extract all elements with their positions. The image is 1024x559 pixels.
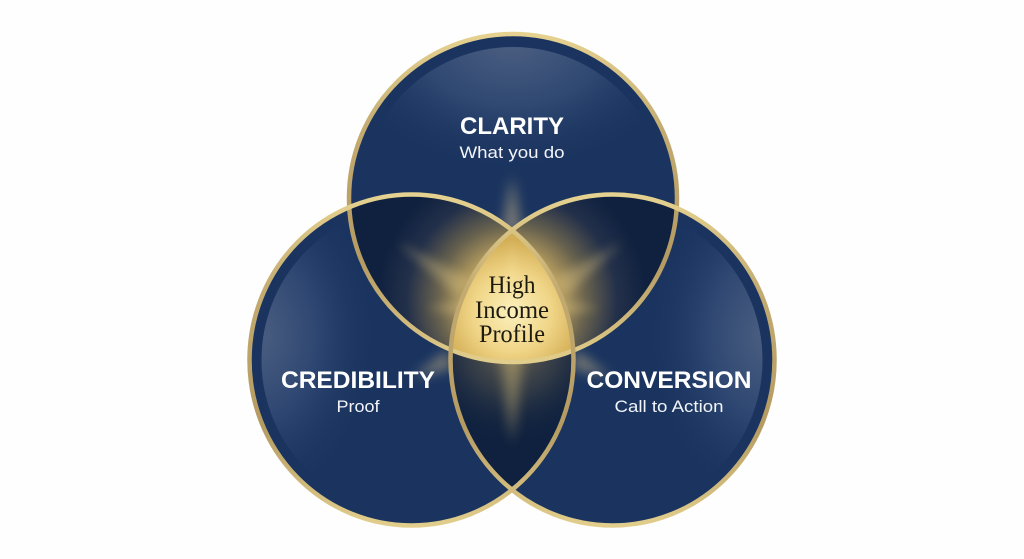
circle: clarity [349,34,677,362]
venn diagram [247,32,777,528]
outer glow rays [412,175,612,378]
label: credibility [281,367,435,416]
label: conversion: CONVERSION [586,367,752,394]
gold ring: conversion [450,194,774,526]
center region: high income profile [453,233,571,360]
overlap: clarity and credibility [352,196,508,346]
label: conversion [586,367,752,416]
light rays [398,243,622,316]
gold ring: clarity [349,34,677,362]
label: conversion: Call to Action [614,397,724,416]
label: clarity [460,113,564,162]
label: high income profile [475,272,549,348]
label: clarity: CLARITY [460,113,564,140]
overlap: clarity and conversion [516,196,674,348]
circle: credibility [250,194,574,526]
circle: conversion [450,194,774,526]
gold ring: credibility [250,194,574,526]
label: high income profile: Profile [479,321,545,348]
label: credibility: CREDIBILITY [281,367,435,394]
label: credibility: Proof [336,397,380,416]
label: clarity: What you do [460,143,564,162]
overlap: credibility and conversion [452,353,572,486]
label: high income profile: Income [475,297,549,324]
label: high income profile: High [488,272,536,299]
